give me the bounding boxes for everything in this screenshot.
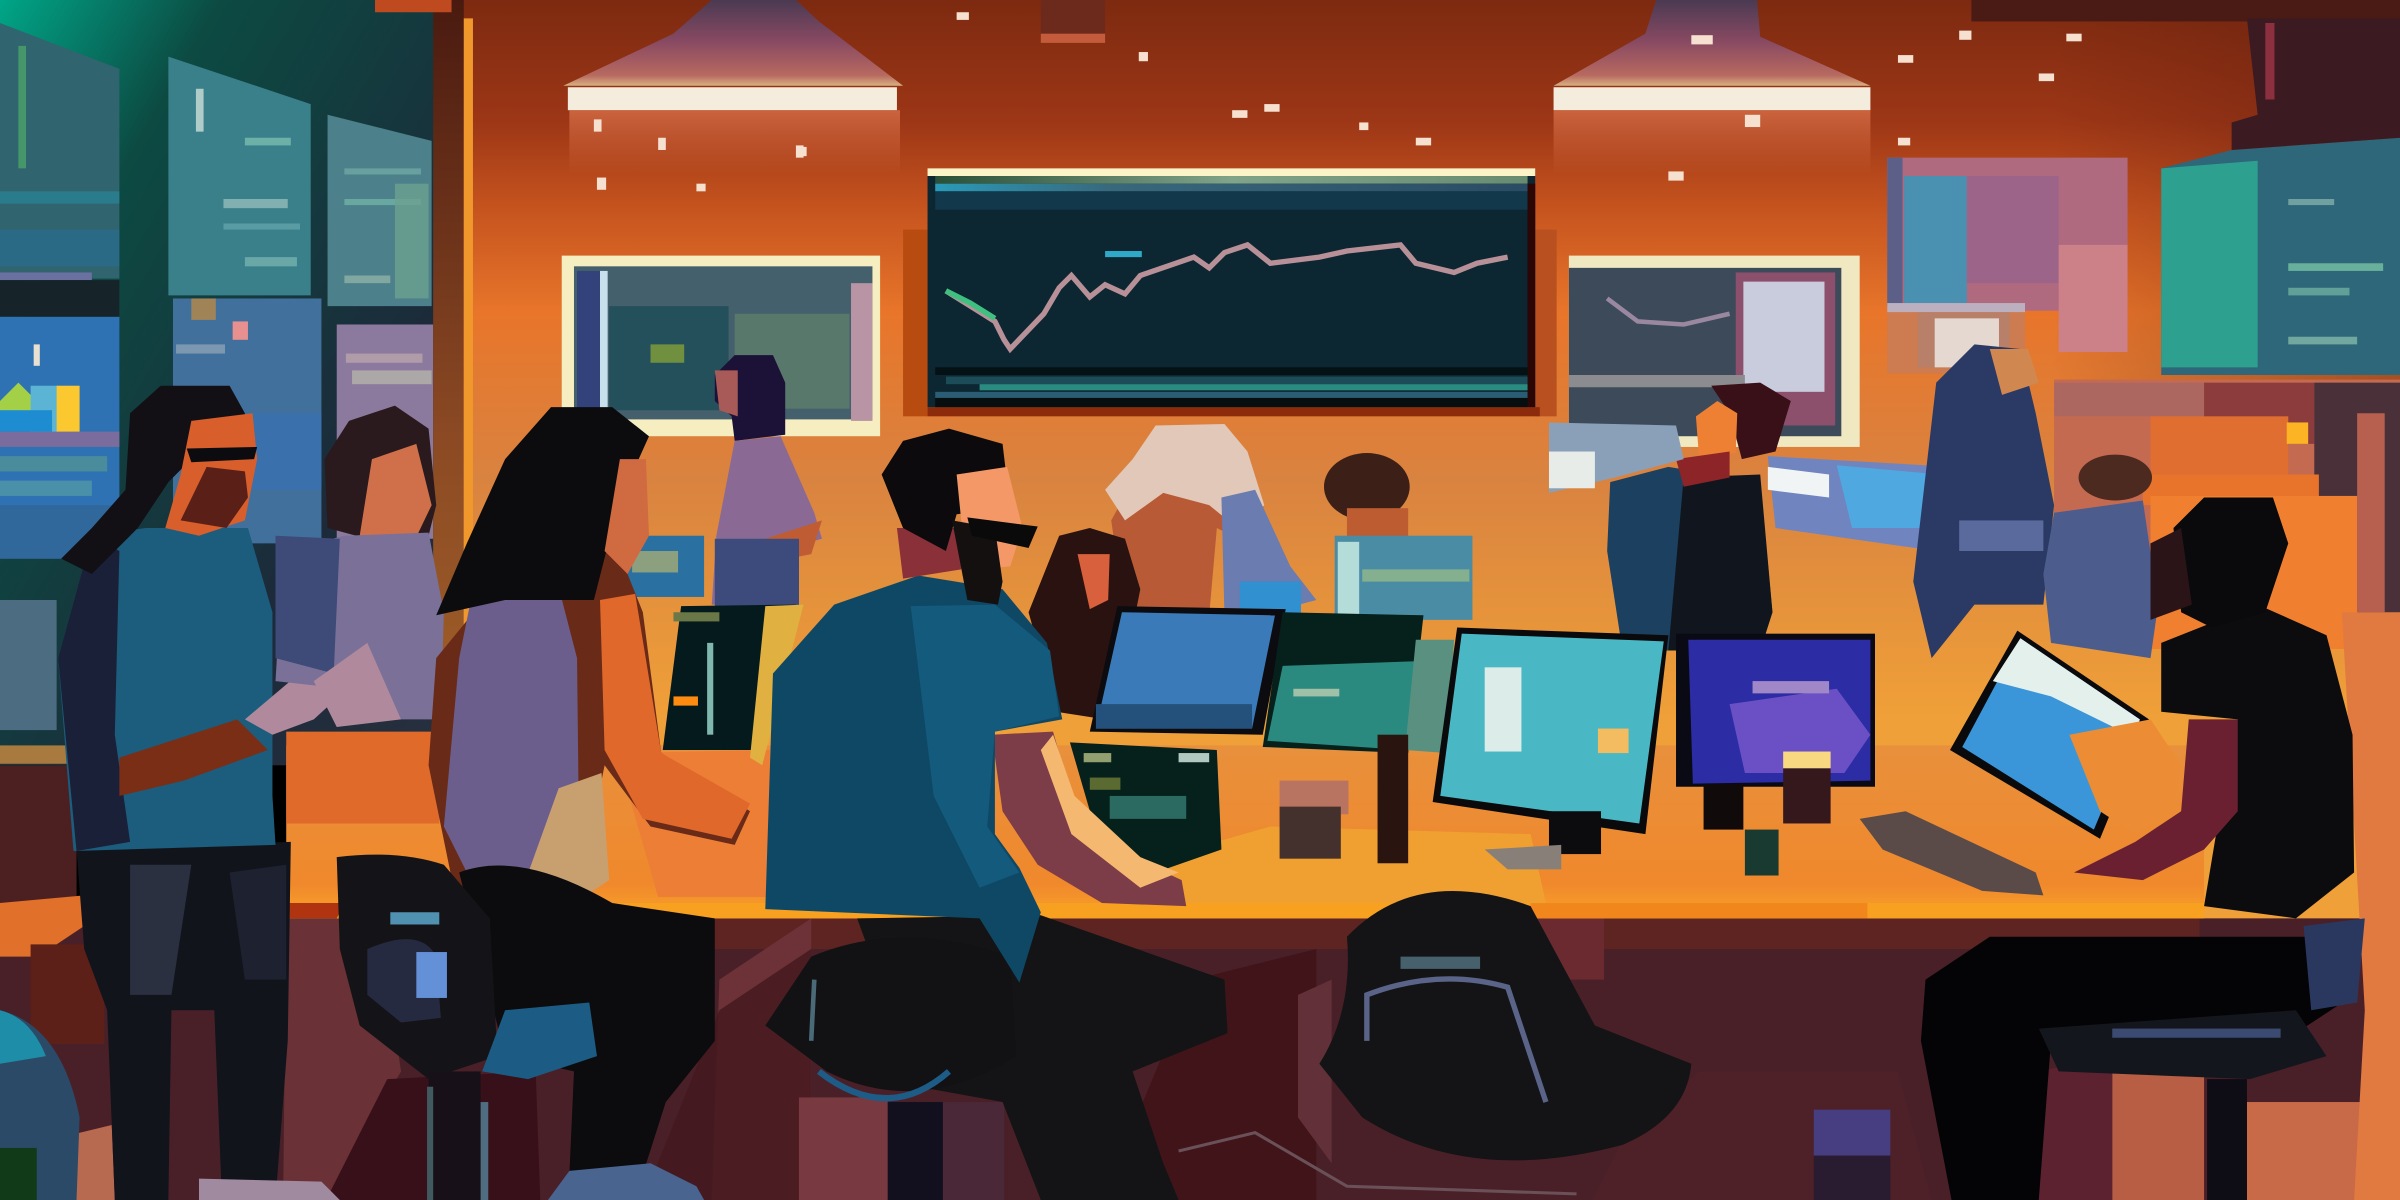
tank top [444, 569, 605, 934]
right window panel with teal and pink sections [1887, 158, 2128, 373]
seat [482, 1003, 597, 1079]
blue tablet on table [1090, 606, 1286, 735]
left screen wall [0, 0, 444, 765]
shirt [2161, 605, 2354, 918]
pillar with lit edge [433, 0, 473, 735]
chair back [337, 855, 497, 1079]
screen: side code monitor [328, 115, 432, 306]
screen: teal code monitor [168, 57, 311, 295]
torso [712, 436, 822, 605]
stool back [2304, 918, 2365, 1010]
person: teal shirt man with tablet, left [58, 386, 383, 1200]
left foreground table and shelf [0, 600, 115, 1200]
right laptop with blue screen [1860, 631, 2149, 895]
shoes [199, 1179, 340, 1200]
forearm [992, 732, 1186, 906]
person: seated man in black, right [1921, 497, 2365, 1200]
ceiling dark beams and sparkle lights [375, 0, 2400, 191]
person: woman in lavender shirt [276, 406, 444, 727]
pole [429, 1071, 481, 1200]
purple monitor [1676, 634, 1875, 830]
large cyan monitor [1433, 628, 1668, 869]
left framed picture [562, 256, 880, 436]
screen: lower blue monitor [173, 298, 321, 543]
laptops behind the raised arm [1549, 422, 1952, 551]
cups by the monitor [1745, 752, 1831, 876]
person: young man at screen [1324, 453, 1410, 539]
bottle on table [1378, 735, 1408, 863]
stool [765, 938, 1016, 1091]
arm [2074, 719, 2238, 880]
hair and head [882, 429, 1010, 551]
teal monitor on table [1263, 612, 1454, 753]
dark band under monitor [0, 280, 119, 317]
person: tall figure far right in navy [1913, 344, 2054, 658]
face [165, 413, 257, 536]
trousers [459, 866, 715, 1174]
right green monitor [2161, 138, 2400, 375]
foreground round object bottom left [0, 1010, 80, 1200]
left ceiling lamp [563, 0, 903, 174]
head [2173, 497, 2288, 628]
small bluish monitor [1335, 536, 1472, 620]
shirt [58, 528, 276, 851]
black trousers [857, 915, 1228, 1200]
central black chair with backpack outline [1319, 891, 1691, 1160]
person: white-haired figure [1105, 424, 1316, 615]
person: standing woman in background [712, 355, 822, 606]
central wall screen with line chart [903, 168, 1557, 416]
right ceiling lamp [1554, 0, 1870, 174]
screen: blue chart monitor [0, 317, 119, 559]
bottom front monitor [1070, 742, 1221, 872]
person: woman with dark hair behind table [1029, 528, 1140, 719]
legs [1921, 937, 2354, 1200]
bottom cable and floor lines [1179, 1133, 1577, 1194]
keyboard [1860, 811, 2043, 895]
arm and hand [119, 719, 268, 796]
stool seat [2039, 1010, 2327, 1079]
right back shelves [2054, 380, 2400, 649]
tablet [245, 640, 383, 735]
beard [952, 520, 1003, 605]
large orange work table [286, 732, 2204, 918]
dark monitor with tablet beside long-haired man [663, 605, 804, 765]
small tablet behind table [617, 536, 704, 597]
screen: upper left monitor [0, 23, 119, 280]
item on floor: blue box [1814, 1110, 1890, 1200]
chart line [946, 245, 1508, 349]
stool and black trousers, long-haired man [337, 855, 715, 1200]
shirt [765, 576, 1062, 983]
mug on table [1280, 781, 1348, 859]
back and arms [429, 536, 750, 918]
person: blue shirt figure on right [2043, 455, 2158, 658]
right dark upper cabinet [2232, 18, 2400, 150]
person: central man in teal shirt [765, 429, 1228, 1200]
stool pole [2207, 1079, 2247, 1200]
screen: lavender monitor [337, 324, 433, 539]
neck [897, 528, 961, 579]
head [715, 355, 785, 441]
person: long-haired man in tank top [429, 407, 750, 934]
hair [436, 407, 649, 615]
glasses [967, 517, 1038, 548]
right framed picture [1569, 256, 1860, 447]
shoe [548, 1163, 704, 1200]
person: woman with arm raised, dark jacket [1607, 383, 1791, 651]
hair [61, 386, 245, 574]
jeans [77, 842, 291, 1200]
floor [0, 612, 2400, 1200]
